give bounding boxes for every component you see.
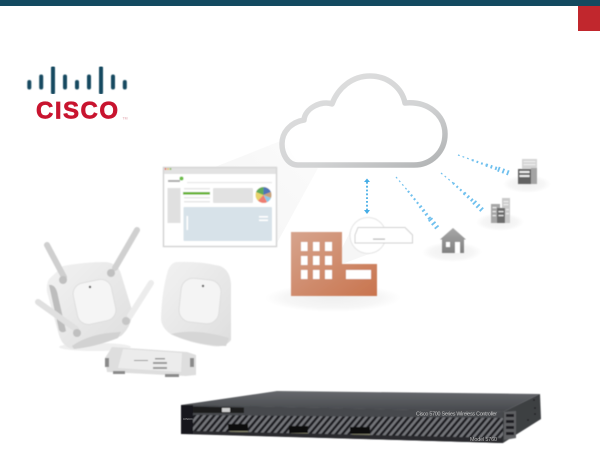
model number: Model 5760 — [470, 437, 497, 443]
summary box — [213, 188, 253, 203]
vent slots — [506, 414, 514, 435]
AP lower shading — [72, 332, 121, 349]
branch site — [476, 198, 524, 231]
callout circle — [350, 218, 386, 254]
dotted link: cloud to router — [364, 178, 370, 214]
status LED — [89, 286, 91, 288]
window buttons — [164, 168, 172, 170]
antenna lower left — [38, 302, 81, 337]
module body — [105, 347, 196, 376]
window frame — [164, 168, 276, 246]
module label — [134, 358, 167, 369]
AP dome — [178, 277, 222, 325]
module face — [118, 349, 182, 372]
wireless link: branch office — [441, 173, 483, 211]
model heading: Cisco 5700 Series Wireless Controller — [416, 412, 497, 418]
access point with antennas — [38, 230, 151, 351]
dashboard logo — [168, 176, 184, 182]
AP body — [47, 262, 132, 349]
blue map panel — [184, 207, 272, 241]
end vent — [504, 411, 516, 440]
logo wordmark: CISCO — [36, 98, 118, 124]
wireless controller — [181, 391, 541, 443]
console port — [222, 408, 230, 412]
wedge: router callout to office — [342, 226, 380, 264]
side panel — [503, 394, 541, 443]
home site — [422, 228, 482, 262]
AP lower shading — [171, 332, 229, 346]
ground shadow — [59, 343, 131, 351]
port 3 — [350, 427, 370, 435]
light beam: dashboard to cloud — [215, 140, 318, 243]
AP dome — [71, 277, 118, 326]
home shadow — [422, 242, 482, 262]
port 2 — [289, 426, 308, 434]
branch shadow — [476, 213, 524, 231]
access point internal antenna — [161, 262, 231, 346]
port 1 — [228, 424, 248, 432]
wireless link: home — [396, 177, 439, 230]
campus site — [503, 159, 551, 193]
expansion module — [105, 347, 196, 377]
label strip — [193, 406, 244, 413]
antenna top left — [47, 245, 67, 284]
red corner tab — [578, 6, 600, 31]
cisco logo — [29, 68, 128, 124]
trademark: TM — [122, 116, 128, 120]
building body — [291, 232, 377, 296]
AP body — [161, 262, 231, 346]
router callout — [350, 218, 412, 254]
front logo: CISCO — [183, 417, 193, 421]
AP side recess — [49, 285, 66, 332]
campus towers icon — [518, 159, 537, 184]
antenna top right — [107, 230, 137, 277]
front panel — [181, 405, 503, 443]
upper front strip — [193, 405, 503, 418]
cloud — [282, 76, 445, 165]
dotted shaft — [366, 182, 368, 211]
router leds — [373, 238, 385, 240]
panel marks — [186, 216, 268, 230]
arrow heads — [364, 178, 370, 214]
top bar — [0, 0, 600, 6]
side screws — [527, 399, 536, 421]
header rule — [187, 182, 272, 183]
campus shadow — [503, 175, 551, 193]
logo bars — [29, 68, 125, 92]
logo block — [181, 405, 193, 434]
browser chrome — [164, 168, 276, 174]
status LED — [202, 285, 204, 287]
windows — [301, 242, 371, 279]
house icon — [440, 228, 466, 253]
module feet — [105, 358, 194, 377]
dashboard window — [164, 168, 276, 246]
office ground shadow — [265, 284, 401, 312]
branch towers icon — [491, 198, 510, 223]
office building — [291, 232, 377, 296]
pie chart — [256, 187, 272, 203]
wireless link: campus — [458, 155, 510, 174]
antenna lower right — [122, 283, 151, 325]
bottom edge — [193, 431, 503, 443]
top surface — [181, 391, 540, 412]
hatched vent — [193, 415, 503, 438]
list rows — [183, 188, 210, 202]
sidebar — [168, 188, 180, 223]
router icon — [355, 228, 412, 243]
